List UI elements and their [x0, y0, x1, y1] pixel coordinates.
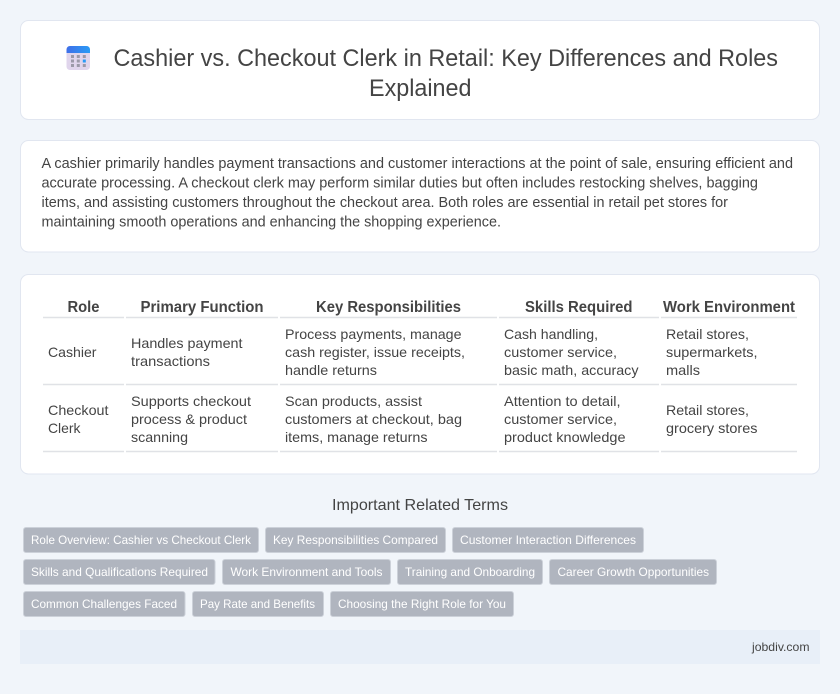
- tag: training: Training and Onboarding: [405, 565, 535, 579]
- title: Cashier vs. Checkout Clerk in Retail: Key Differences and Roles: [114, 45, 778, 72]
- intro paragraph: [42, 156, 793, 230]
- table row: Checkout Clerk: Attention to detail,: [504, 393, 620, 409]
- table row: Checkout Clerk: [48, 393, 758, 445]
- table row: Cashier: Cashier: [48, 344, 97, 360]
- table row: Checkout Clerk: process & product: [131, 411, 247, 427]
- table row: Cashier: [48, 326, 758, 378]
- tag: common challenges: [24, 592, 185, 616]
- table row: Checkout Clerk: customers at checkout, bag: [285, 411, 462, 427]
- table header row: Role: [68, 299, 100, 316]
- table row: Cashier: supermarkets,: [666, 344, 758, 360]
- table header row: Key Responsibilities: [316, 299, 461, 316]
- title: Explained: [369, 75, 472, 102]
- tag: common challenges: Common Challenges Faced: [31, 597, 177, 611]
- table header row: [68, 299, 796, 316]
- table row: Cashier: basic math, accuracy: [504, 362, 638, 378]
- tag: pay rate: Pay Rate and Benefits: [200, 597, 315, 611]
- table row: Cashier: Retail stores,: [666, 326, 749, 342]
- table row: Cashier: handle returns: [285, 362, 377, 378]
- table row: Checkout Clerk: product knowledge: [504, 429, 626, 445]
- heading: important related terms: Important Related Terms: [332, 497, 508, 514]
- table header row: Skills Required: [525, 299, 632, 316]
- tag: work environment: Work Environment and Tools: [230, 565, 382, 579]
- intro paragraph: items, and assisting customers throughout the checkout area. Both roles are essential in retail pet stores for: [42, 195, 728, 211]
- footer bar: jobdiv.com: [751, 640, 810, 654]
- panel: title header: [20, 20, 820, 120]
- tag: training: [398, 560, 542, 584]
- table row: Checkout Clerk: Scan products, assist: [285, 393, 422, 409]
- tag: skills and qualifications: Skills and Qualifications Required: [31, 565, 208, 579]
- tag: work environment: [222, 560, 390, 584]
- tag: key responsibilities: Key Responsibilities Compared: [273, 533, 438, 547]
- panel: comparison table: [20, 274, 820, 474]
- table row: Cashier: customer service,: [504, 344, 617, 360]
- tag: choosing role: [330, 592, 514, 616]
- intro paragraph: A cashier primarily handles payment transactions and customer interactions at the point of sale, ensuring efficient and: [42, 156, 793, 172]
- tag: customer interaction: Customer Interaction Differences: [460, 533, 636, 547]
- table row: Checkout Clerk: grocery stores: [666, 420, 758, 436]
- table row: Checkout Clerk: Checkout: [48, 402, 109, 418]
- title: [114, 45, 778, 102]
- table header row: Primary Function: [140, 299, 264, 316]
- table row: Cashier: malls: [666, 362, 700, 378]
- tag: customer interaction: [452, 528, 644, 552]
- tag: career growth: Career Growth Opportunities: [558, 565, 709, 579]
- tag: career growth: [550, 560, 716, 584]
- intro paragraph: accurate processing. A checkout clerk may perform similar duties but often includes restocking shelves, bagging: [42, 176, 758, 192]
- icon: calendar: [66, 46, 90, 70]
- table row: Cashier: Handles payment: [131, 335, 243, 351]
- table row: Cashier: Cash handling,: [504, 326, 598, 342]
- footer bar: [20, 630, 820, 664]
- tag: key responsibilities: [266, 528, 446, 552]
- table row: Checkout Clerk: Retail stores,: [666, 402, 749, 418]
- table row: Cashier: cash register, issue receipts,: [285, 344, 465, 360]
- table row: Checkout Clerk: scanning: [131, 429, 188, 445]
- table header row: Work Environment: [663, 299, 796, 316]
- table row: Cashier: Process payments, manage: [285, 326, 462, 342]
- table row: Checkout Clerk: customer service,: [504, 411, 617, 427]
- tag: role overview: Role Overview: Cashier vs Checkout Clerk: [31, 533, 252, 547]
- table row: Checkout Clerk: items, manage returns: [285, 429, 428, 445]
- panel: introduction text: [20, 140, 820, 252]
- tag: choosing role: Choosing the Right Role for You: [338, 597, 506, 611]
- intro paragraph: maintaining smooth operations and enhancing the shopping experience.: [42, 214, 501, 230]
- table row: Checkout Clerk: Clerk: [48, 420, 81, 436]
- tag: pay rate: [192, 592, 324, 616]
- tag: skills and qualifications: [24, 560, 215, 584]
- tag: role overview: [24, 528, 258, 552]
- table row: Checkout Clerk: Supports checkout: [131, 393, 251, 409]
- table row: Cashier: transactions: [131, 353, 210, 369]
- related term tags: [24, 528, 716, 616]
